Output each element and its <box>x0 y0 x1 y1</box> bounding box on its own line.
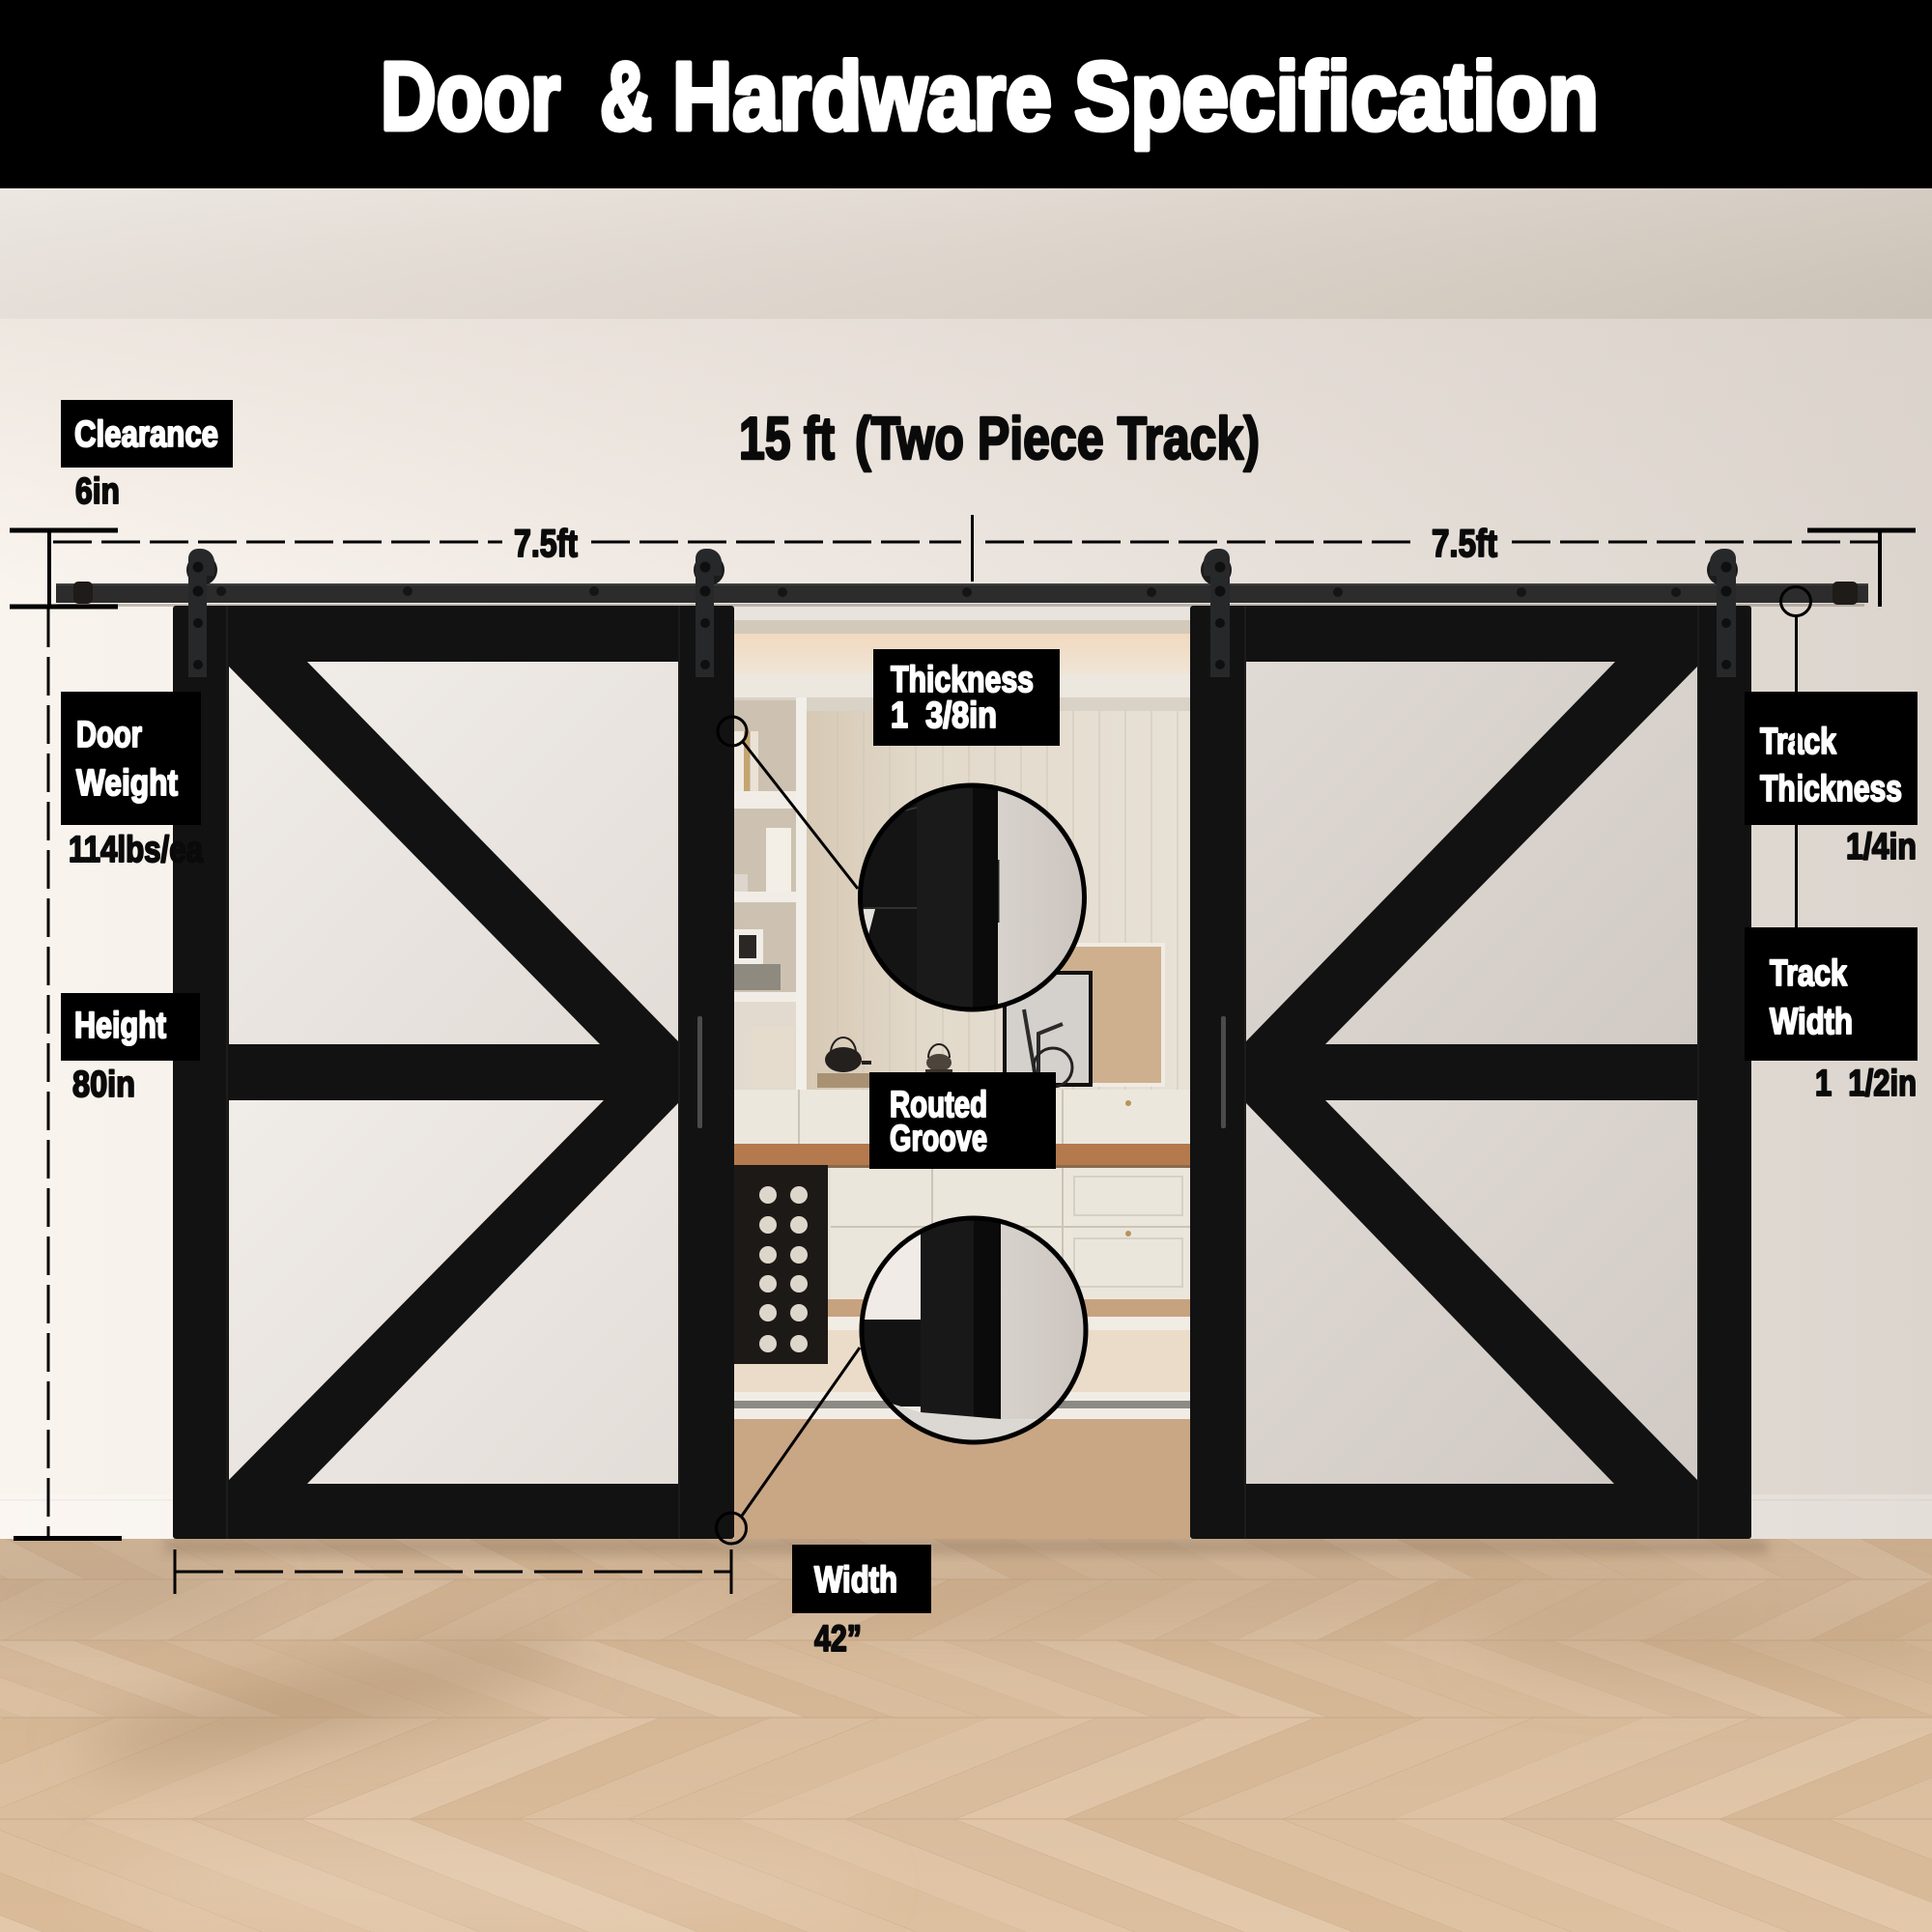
center divider tick <box>971 515 974 582</box>
dimension: door width <box>175 1549 731 1594</box>
cabinets and countertop <box>734 1090 1190 1299</box>
floor beyond the opening <box>734 1299 1190 1539</box>
hanger strap 2 <box>694 549 724 677</box>
panelled back wall <box>807 711 1190 1090</box>
callout: routed groove label <box>869 1072 1056 1169</box>
dimension: track span, right half: 7.5ft <box>1432 523 1497 565</box>
sliding track <box>56 582 1868 605</box>
perforated black console <box>734 1165 828 1364</box>
callout: thickness label <box>873 649 1060 746</box>
lower panel triangles <box>1246 1100 1697 1484</box>
callout: routed groove label: Groove <box>890 1119 987 1159</box>
left barn door <box>173 606 734 1539</box>
detail circle: door thickness close-up <box>858 783 1090 1011</box>
hanger strap 4 <box>1707 549 1738 677</box>
callout: track width <box>1745 927 1918 1104</box>
callout: thickness label: 1 3/8in <box>891 696 997 736</box>
callout: track thickness <box>1745 692 1918 867</box>
right barn door <box>1190 606 1751 1539</box>
title: Specification <box>1074 43 1599 151</box>
door handle <box>1221 1016 1226 1128</box>
interior ceiling and cove light <box>734 603 1190 711</box>
door frame seams <box>1245 606 1698 1539</box>
track end stops <box>73 582 1858 605</box>
callout: clearance: Clearance <box>74 414 218 455</box>
heading: total track length: 15 ft <box>739 406 835 472</box>
upper panel triangles <box>229 662 678 1044</box>
teapots <box>817 1037 952 1088</box>
opening: interior room scene <box>734 603 1190 1539</box>
dimension: track span, left half: 7.5ft <box>514 523 578 565</box>
title <box>381 43 1599 151</box>
callout: track width: Track <box>1770 953 1848 994</box>
callout: thickness label: Thickness <box>891 660 1034 700</box>
callout: door weight: Weight <box>76 763 178 804</box>
callout: height <box>61 993 200 1105</box>
callout: door weight: 114lbs/ea <box>69 830 204 870</box>
herringbone wood floor <box>0 1539 1932 1932</box>
ceiling band <box>0 188 1932 319</box>
door frame seams <box>227 606 679 1539</box>
dimension: track span, left half <box>10 523 961 607</box>
title: & <box>600 43 652 151</box>
pointer: groove detail <box>717 1348 860 1544</box>
heading: total track length <box>739 406 1260 472</box>
upper panel triangles <box>1246 662 1697 1044</box>
track shadow <box>58 604 1864 607</box>
callout: track width: Width <box>1770 1002 1853 1042</box>
callout: height: 80in <box>72 1065 135 1105</box>
callout: door weight: Door <box>76 715 142 755</box>
callout: width: 42” <box>814 1619 862 1660</box>
callout: width: Width <box>814 1560 897 1601</box>
callout: clearance: 6in <box>75 471 120 512</box>
callout: track thickness: 1/4in <box>1846 827 1917 867</box>
pointer: track detail <box>1781 587 1810 927</box>
callout: clearance <box>61 400 233 512</box>
heading: total track length: (Two Piece Track) <box>855 406 1260 472</box>
hanger strap 3 <box>1201 549 1232 677</box>
wall <box>0 319 1932 1539</box>
door handle <box>697 1016 702 1128</box>
callout: routed groove label: Routed <box>890 1085 987 1125</box>
dimension: door height dashed line <box>14 609 122 1541</box>
wall art <box>1003 943 1165 1087</box>
title: Door <box>381 43 560 151</box>
callout: door weight <box>61 692 204 870</box>
callout: width <box>792 1545 931 1660</box>
title: Hardware <box>672 43 1052 151</box>
callout: height: Height <box>74 1006 166 1046</box>
hanger strap 1 <box>186 549 217 677</box>
baseboard <box>0 1494 1932 1539</box>
pointer: thickness detail <box>718 717 858 889</box>
detail circle: routed groove close-up <box>850 1216 1090 1444</box>
header bar <box>0 0 1932 188</box>
lower panel triangles <box>229 1100 678 1484</box>
bookshelf <box>734 697 807 1090</box>
callout: track thickness: Track <box>1760 722 1837 762</box>
